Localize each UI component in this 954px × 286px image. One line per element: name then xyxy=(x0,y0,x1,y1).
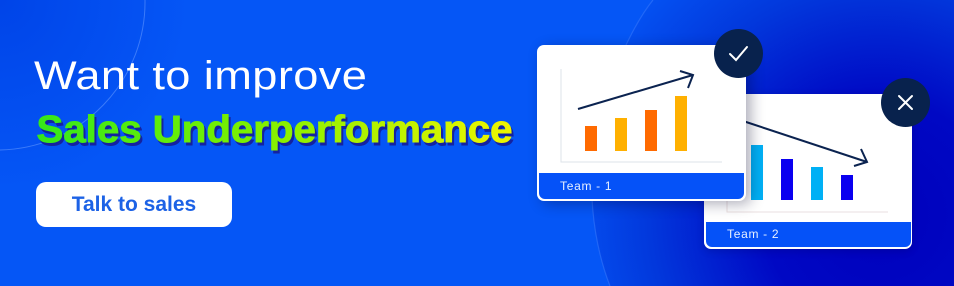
label bar: team 2 xyxy=(706,222,911,247)
bar chart: team 2 xyxy=(726,120,888,212)
label bar: team 1 xyxy=(539,173,744,199)
icon: check badge xyxy=(714,29,763,78)
icon: cross badge xyxy=(881,78,930,127)
panel: team 2 card xyxy=(704,94,912,249)
arrow: upward trend xyxy=(578,71,693,109)
arrow: downward trend xyxy=(734,118,867,166)
label bar: team 1: Team - 1 xyxy=(560,179,612,193)
label bar: team 2: Team - 2 xyxy=(727,227,779,241)
button: talk to sales xyxy=(36,182,232,227)
panel: team 1 card xyxy=(537,45,746,201)
bar chart: team 1 xyxy=(560,69,722,162)
title: first line: Want to improve xyxy=(34,54,367,98)
button: talk to sales: Talk to sales xyxy=(72,193,196,216)
title: highlighted line: Sales Underperformance xyxy=(36,109,512,151)
